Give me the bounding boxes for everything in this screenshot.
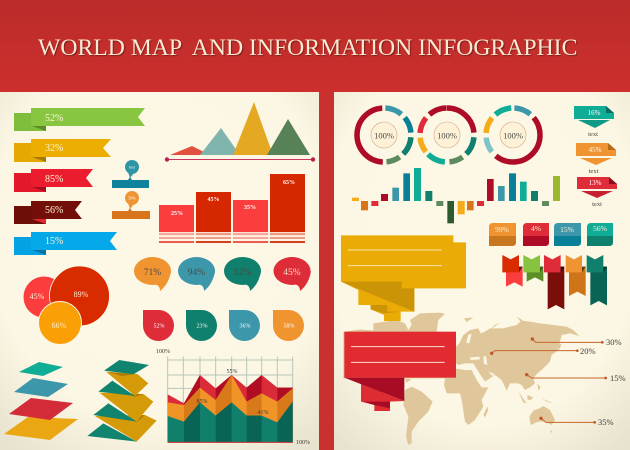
- small callout: teal: [112, 160, 149, 188]
- venn circles: [24, 266, 110, 344]
- drop labels: 52%: [154, 324, 164, 330]
- ring: chart 1: 100%: [374, 130, 394, 140]
- bar chart: 65%: [283, 180, 295, 186]
- ring: chart 3: [486, 108, 540, 162]
- percent tabs: 4%: [531, 224, 541, 233]
- area chart: 85%: [196, 399, 208, 405]
- drop labels: 36%: [240, 324, 250, 330]
- percent tabs: 56%: [593, 224, 607, 233]
- tag: 16%: [574, 106, 614, 138]
- ribbon: 85%: [14, 169, 93, 192]
- percent tabs: [489, 223, 613, 246]
- bubble 45%: 45%: [283, 268, 301, 278]
- venn circles: 45%: [30, 292, 45, 301]
- map labels: 15%: [610, 373, 626, 383]
- drop labels: 23%: [196, 324, 208, 330]
- ring: chart 2: 100%: [437, 130, 457, 140]
- ribbon: 32%: 32%: [45, 143, 63, 154]
- area chart: 41%: [258, 410, 268, 416]
- map labels: 20%: [580, 346, 596, 356]
- ribbon: 85%: 85%: [45, 174, 63, 185]
- area chart: 100%: [156, 349, 170, 355]
- small callout: teal: text: [129, 164, 136, 170]
- ring: chart 3: 100%: [503, 130, 523, 140]
- panel: left: [0, 92, 319, 450]
- ribbon: 15%: [14, 232, 117, 255]
- bubble 71%: [134, 257, 171, 291]
- tag: 13%: text: [592, 201, 602, 208]
- drop labels: [143, 310, 304, 341]
- bubble 94%: [178, 257, 215, 291]
- bubble 82%: [224, 257, 261, 291]
- tag: 16%: 16%: [588, 109, 601, 117]
- tag: 45%: 45%: [589, 146, 602, 154]
- area chart: 55%: [226, 369, 238, 375]
- ribbon: 56%: [14, 201, 82, 224]
- bubble 45%: [274, 257, 311, 291]
- percent tabs: 99%: [495, 225, 509, 234]
- header band: [0, 0, 630, 92]
- map leader lines: [490, 337, 607, 424]
- stacked layers: [4, 362, 78, 440]
- ribbon: 52%: [14, 108, 145, 131]
- map labels: 35%: [598, 417, 614, 427]
- area chart: [156, 349, 310, 446]
- ring: chart 2: [420, 108, 474, 162]
- small callout: orange: 50%: [128, 196, 136, 200]
- red banner: [344, 332, 456, 411]
- bubble 94%: 94%: [188, 268, 205, 278]
- ribbon: 56%: 56%: [45, 205, 63, 216]
- tag: 45%: text: [589, 168, 599, 175]
- bubble 82%: 82%: [234, 268, 251, 278]
- bar chart: 35%: [244, 205, 256, 211]
- ribbon: 15%: 15%: [45, 236, 63, 247]
- bar chart: 25%: [171, 211, 183, 217]
- ribbon: 32%: [14, 139, 111, 162]
- venn circles: 89%: [74, 290, 89, 299]
- world map: [343, 313, 579, 445]
- title: WORLD MAP AND INFORMATION INFOGRAPHIC: [38, 35, 577, 61]
- drop labels: 58%: [284, 324, 294, 330]
- mountain chart: [165, 102, 315, 162]
- venn circles: 66%: [52, 321, 67, 330]
- ring: chart 1: [357, 108, 411, 162]
- ribbons: [14, 108, 145, 255]
- area chart: 100%: [296, 440, 310, 446]
- tag: 45%: [576, 143, 616, 175]
- bar chart: 45%: [208, 197, 220, 203]
- ribbon: 52%: 52%: [45, 113, 63, 124]
- inland seas: [466, 333, 495, 376]
- panel: right: [334, 92, 630, 450]
- tag: 13%: 13%: [589, 179, 602, 187]
- tag: 16%: text: [588, 131, 598, 138]
- bubble 71%: 71%: [144, 268, 161, 278]
- speech bubbles: [134, 257, 311, 291]
- column chart: positive and negative bars: [352, 168, 560, 223]
- map labels: 30%: [606, 337, 622, 347]
- small callout: orange: [112, 191, 150, 219]
- tag: 13%: [577, 177, 617, 208]
- percent tabs: 15%: [560, 225, 574, 234]
- bar chart: [159, 174, 305, 242]
- folded stack: [87, 360, 157, 442]
- bookmarks: [502, 255, 607, 309]
- map labels: [580, 337, 626, 427]
- yellow banner: [341, 235, 466, 321]
